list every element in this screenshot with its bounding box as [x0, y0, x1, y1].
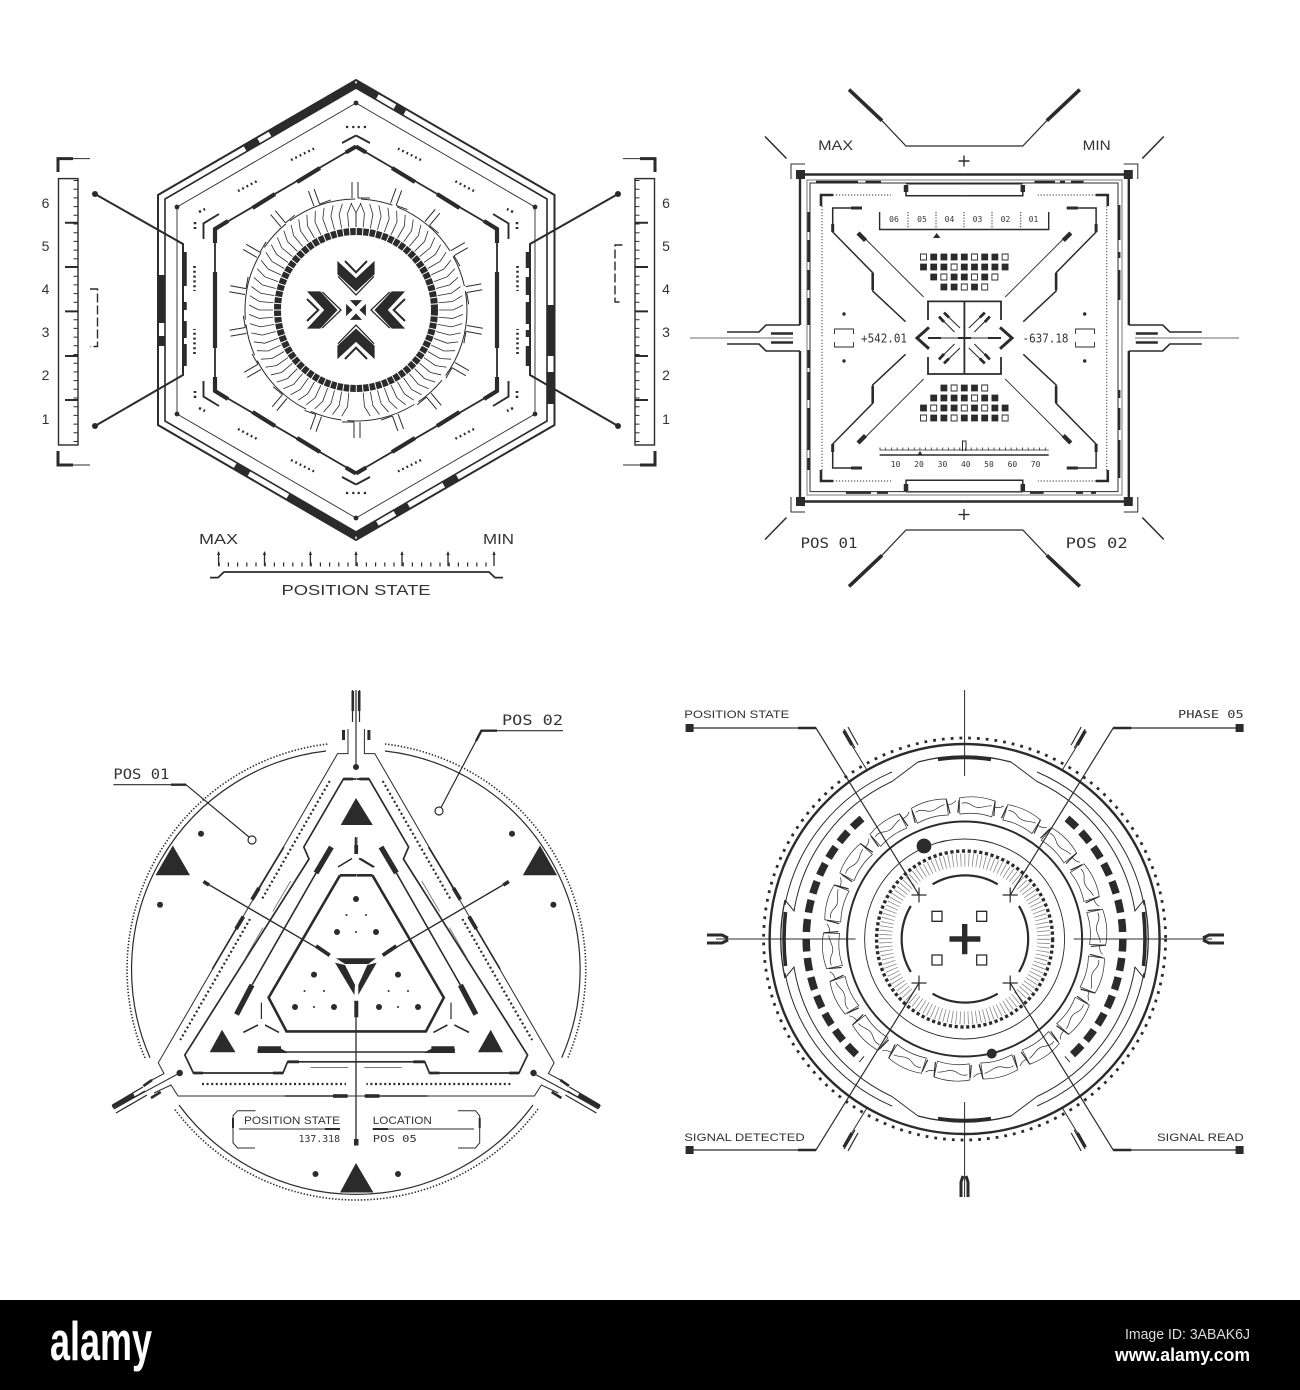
inner arcs [902, 875, 1028, 1003]
ruler numbers: 2 [42, 367, 50, 383]
corner labels [800, 137, 1128, 552]
bottom pixel grid [920, 385, 1008, 421]
callout: POS 02 [435, 713, 563, 815]
numeric scale: 70 [1031, 460, 1041, 469]
connector lines to rulers [92, 191, 621, 429]
image id: Image ID: 3ABAK6J [1125, 1326, 1250, 1343]
callout labels: SIGNAL DETECTED [684, 1132, 805, 1144]
position state scale [199, 531, 514, 599]
left side ruler [58, 159, 98, 465]
inner rings [847, 822, 1082, 1059]
center Y emblem [335, 958, 377, 1146]
callout labels: SIGNAL READ [1157, 1132, 1244, 1144]
marker dots [157, 831, 556, 1177]
panel: hexagon HUD [42, 80, 670, 599]
ruler numbers: 6 [662, 195, 670, 211]
logo: alamy [50, 1310, 152, 1372]
location box [373, 1111, 480, 1148]
filled triangles [156, 798, 557, 1192]
readouts: +542.01 [861, 332, 907, 346]
radial dial [228, 182, 484, 438]
callout labels [684, 708, 1244, 1144]
position state box: 137.318 [299, 1134, 340, 1145]
position state scale: POSITION STATE [282, 582, 430, 599]
outer hexagon frames [158, 80, 554, 540]
icon: converging chevrons [307, 261, 405, 359]
numeric scale: 30 [938, 460, 947, 469]
position state scale: MAX [199, 531, 238, 548]
top pixel grid [920, 254, 1008, 290]
ruler numbers: 3 [42, 324, 50, 340]
ruler numbers: 2 [662, 367, 670, 383]
phase table: 04 [945, 215, 954, 224]
readouts [834, 312, 1094, 363]
phase table: 05 [917, 215, 927, 224]
ruler numbers: 4 [662, 281, 670, 297]
ruler numbers: 6 [42, 195, 50, 211]
symmetric triangular frames [112, 729, 600, 1113]
position state box: POSITION STATE [244, 1115, 340, 1127]
numeric scale: 10 [891, 460, 901, 469]
inner hexagon frame [194, 127, 518, 493]
ruler numbers: 4 [42, 281, 50, 297]
corner labels: MAX [818, 137, 854, 153]
corner labels: POS 02 [1066, 536, 1128, 552]
panel: circular HUD [684, 690, 1244, 1197]
ruler numbers: 5 [662, 238, 670, 254]
panel: triangle HUD [112, 690, 600, 1200]
ruler numbers [42, 195, 670, 427]
ruler numbers: 1 [42, 411, 50, 427]
circular dotted arcs [127, 744, 586, 1200]
footer bar [0, 1300, 1300, 1390]
position state box [233, 1111, 340, 1148]
phase table: 01 [1029, 215, 1038, 224]
central reticle [917, 301, 1012, 374]
readouts: -637.18 [1022, 332, 1068, 346]
numeric scale: 40 [961, 460, 971, 469]
location box: LOCATION [373, 1115, 432, 1127]
thick dash ring [806, 818, 1123, 1060]
callout: POS 01 [113, 767, 256, 844]
tri-arm marks [356, 838, 373, 867]
ruler numbers: 5 [42, 238, 50, 254]
phase table: 02 [1001, 215, 1010, 224]
square frame and symmetric arms [690, 90, 1239, 586]
callout labels: POSITION STATE [684, 709, 789, 721]
numeric scale: 60 [1008, 460, 1017, 469]
ruler numbers: 3 [662, 324, 670, 340]
corner labels: MIN [1083, 137, 1111, 153]
phase table [880, 212, 1049, 238]
ruler numbers: 1 [662, 411, 670, 427]
callout labels: PHASE 05 [1178, 708, 1244, 721]
position state scale: MIN [483, 531, 514, 548]
phase table: 03 [973, 215, 982, 224]
callout: POS 01: POS 01 [113, 767, 169, 783]
site url: www.alamy.com [1114, 1345, 1250, 1365]
numeric scale [880, 441, 1049, 469]
panel: square HUD [690, 90, 1239, 586]
phase table: 06 [889, 215, 899, 224]
numeric scale: 20 [914, 460, 924, 469]
right side ruler [615, 159, 655, 465]
top stem [352, 690, 360, 770]
corner labels: POS 01 [800, 536, 858, 552]
outer rings [764, 738, 1166, 1140]
numeric scale: 50 [984, 460, 994, 469]
target squares [932, 911, 987, 965]
plus marks [958, 156, 970, 520]
callouts and diagonal arrows [686, 724, 1244, 1154]
location box: POS 05 [373, 1134, 417, 1145]
module ring [820, 794, 1109, 1084]
center plus [950, 924, 980, 954]
axis crosshair lines [707, 690, 1224, 1197]
callout: POS 02: POS 02 [502, 713, 563, 729]
